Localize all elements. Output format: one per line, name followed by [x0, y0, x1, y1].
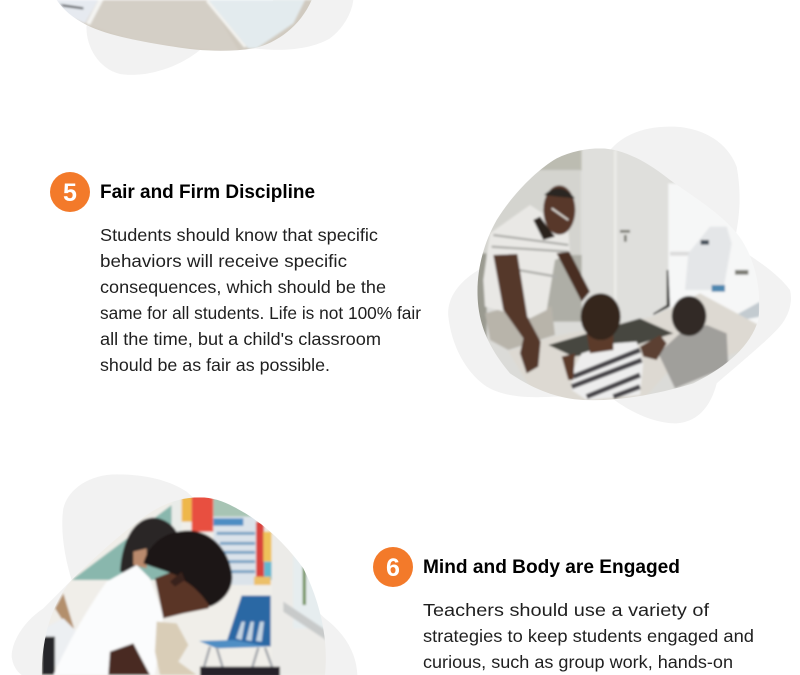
text block: discipline description: consequences, which should be the — [100, 277, 386, 297]
text block: engagement description: curious, such as group work, hands-on — [423, 652, 733, 672]
text block: engagement description: Teachers should use a variety of — [423, 600, 709, 620]
boy two — [658, 325, 728, 388]
chair — [227, 596, 271, 647]
text block: engagement description: strategies to keep students engaged and — [423, 626, 754, 646]
number badge 5 — [50, 172, 90, 212]
text block: discipline description: behaviors will receive specific — [100, 251, 347, 271]
gray blob backdrop — [448, 127, 791, 423]
teddy bear — [155, 622, 197, 675]
cropped photo scene — [473, 147, 767, 403]
cropped photo scene — [37, 495, 330, 675]
number badge 6 — [373, 547, 413, 587]
text block: discipline description: same for all students. Life is not 100% fair — [100, 303, 421, 323]
text block: discipline description: all the time, but a child's classroom — [100, 329, 381, 349]
heading: Fair and Firm Discipline: Fair and Firm Discipline — [100, 182, 315, 203]
photo blob: teacher with two students — [448, 127, 791, 423]
text block: discipline description — [100, 225, 421, 375]
gray blob backdrop right — [253, 0, 353, 50]
heading: Mind and Body are Engaged: Mind and Body are Engaged — [423, 557, 680, 578]
gray blob backdrop left — [87, 25, 200, 75]
number badge 5: 5 — [63, 179, 77, 207]
text block: discipline description: should be as fair as possible. — [100, 355, 330, 375]
boy one — [572, 342, 643, 400]
gray blob backdrop — [12, 474, 357, 675]
photo blob: child with teddy bear in classroom — [12, 474, 357, 675]
text block: discipline description: Students should know that specific — [100, 225, 378, 245]
boy — [53, 565, 163, 675]
number badge 6: 6 — [386, 554, 400, 582]
girl behind — [120, 518, 178, 573]
text block: engagement description — [423, 600, 754, 672]
man — [485, 307, 555, 350]
cropped photo: desk and paper — [57, 0, 312, 51]
photo blob: top illustration — [50, 0, 353, 75]
